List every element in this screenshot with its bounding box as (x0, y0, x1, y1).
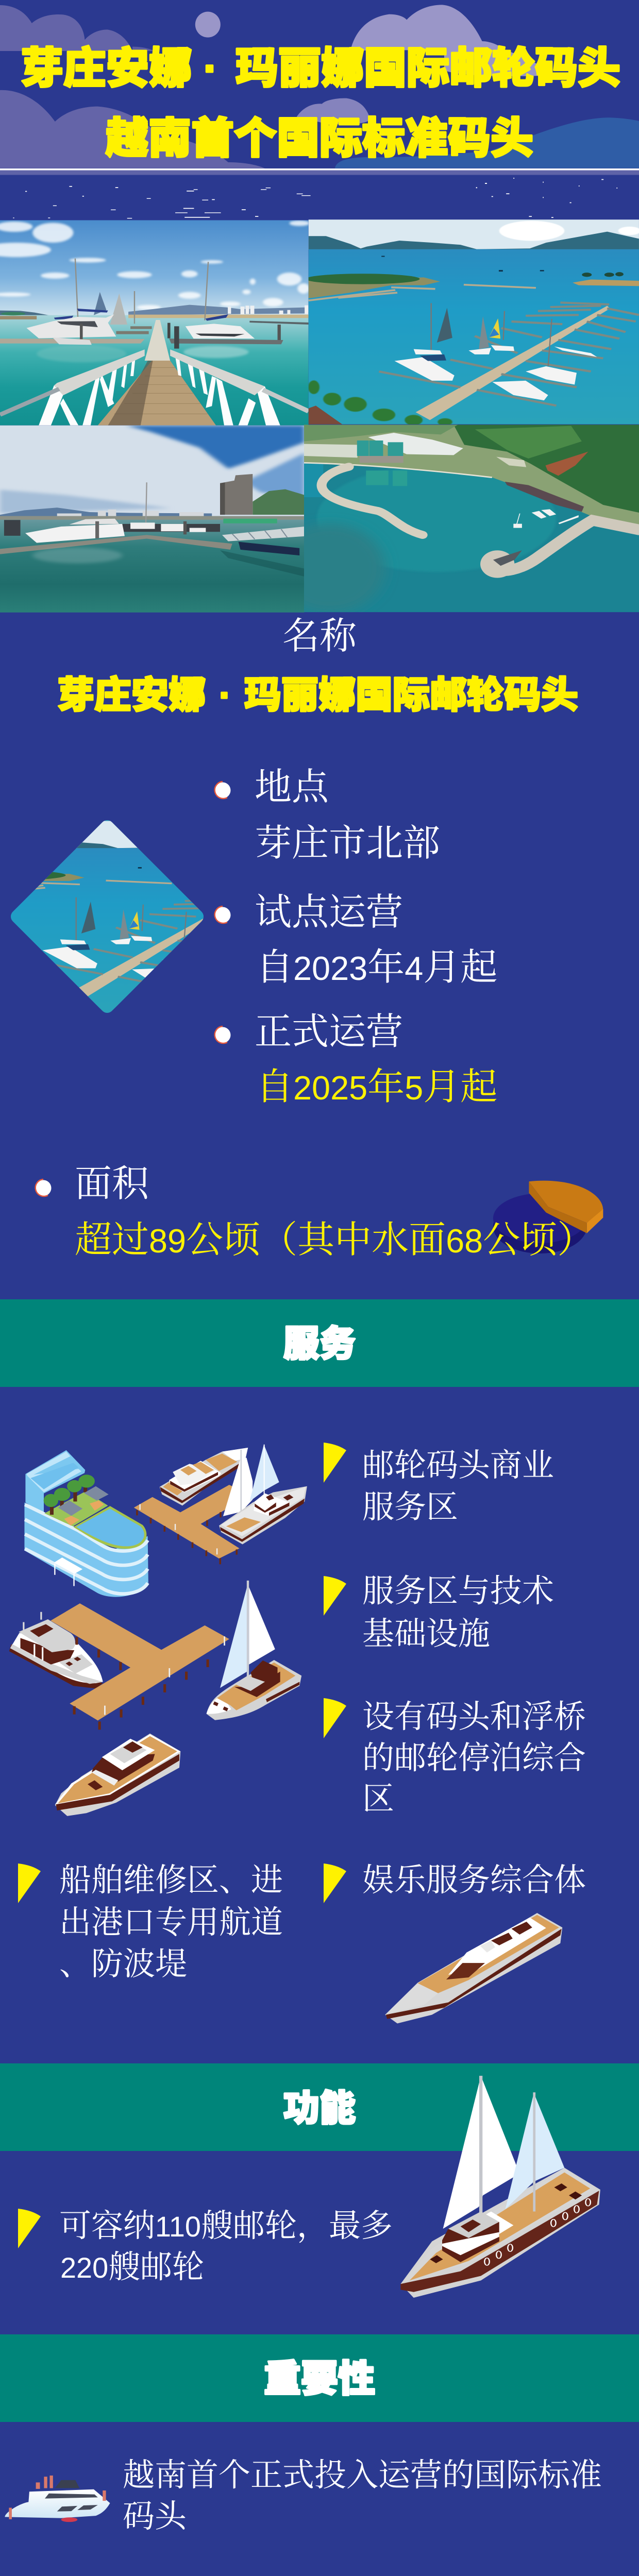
importance item: first in Vietnam: 码头 (123, 2499, 187, 2534)
section band: importance (0, 2334, 639, 2422)
illustration: large sailboat (400, 2076, 600, 2298)
info: location: 地点 (255, 767, 330, 808)
info: location: 芽庄市北部 (255, 823, 440, 864)
photo: walkway to yachts (0, 220, 310, 426)
info: official operation: 自2025年5月起 (256, 1066, 497, 1108)
sailboat two (207, 1581, 301, 1720)
info: official operation: 正式运营 (255, 1011, 403, 1053)
section band: importance: 重要性 (264, 2359, 375, 2400)
service list (18, 1443, 586, 1982)
info: trial operation: 试点运营 (255, 892, 403, 933)
service item: technical infrastructure: 服务区与技术 (362, 1574, 554, 1609)
isometric building (24, 1450, 148, 1597)
info: trial operation: 自2023年4月起 (256, 947, 497, 988)
motor yacht (9, 1612, 103, 1688)
title (21, 44, 620, 162)
service item: berthing complex (324, 1698, 586, 1817)
illustration: motorboat (55, 1734, 180, 1816)
info: location (214, 767, 440, 864)
title: 玛丽娜国际邮轮码头 (236, 44, 620, 92)
service item: ship repair: 出港口专用航道 (59, 1905, 283, 1940)
service item: ship repair: 船舶维修区、进 (59, 1863, 283, 1898)
diamond photo (11, 820, 204, 1013)
photo: aerial marina piers (306, 219, 639, 426)
importance item: first in Vietnam: 越南首个正式投入运营的国际标准 (123, 2458, 602, 2493)
section band: function: 功能 (283, 2088, 356, 2128)
service item: berthing complex: 区 (362, 1782, 394, 1817)
project name: 芽庄安娜 (57, 675, 206, 716)
service item: ship repair (18, 1863, 283, 1982)
header divider band (0, 168, 639, 175)
bullet (214, 906, 231, 923)
icon: yacht with people (5, 2476, 110, 2522)
label: name: 名称 (282, 616, 357, 657)
project name: 玛丽娜国际邮轮码头 (244, 675, 578, 716)
cabin cruiser (160, 1448, 248, 1505)
function item (18, 2209, 393, 2285)
service item: commercial zone: 服务区 (362, 1490, 458, 1525)
photo: aerial bay with breakwaters (274, 425, 639, 613)
star field (13, 178, 617, 218)
sailboat one (219, 1445, 307, 1544)
service item: technical infrastructure (324, 1574, 554, 1652)
illustration: building, dock and boats (9, 1445, 307, 1730)
bullet (35, 1179, 52, 1196)
section band: services (0, 1299, 639, 1387)
service item: technical infrastructure: 基础设施 (362, 1617, 490, 1652)
service item: berthing complex: 的邮轮停泊综合 (362, 1741, 586, 1776)
header clouds and moon (0, 5, 639, 168)
title: · (204, 44, 218, 92)
bullet (214, 1026, 231, 1043)
service item: commercial zone: 邮轮码头商业 (362, 1448, 554, 1483)
function item: 可容纳110艘邮轮，最多 (59, 2209, 393, 2244)
function item: 220艘邮轮 (60, 2250, 204, 2285)
upper dock (134, 1485, 243, 1564)
info: area: 面积 (75, 1163, 150, 1205)
info: area (35, 1163, 594, 1261)
service item: ship repair: 、防波堤 (59, 1947, 187, 1982)
icon: pie chart (493, 1181, 603, 1253)
title: 芽庄安娜 (21, 44, 192, 92)
info: official operation (214, 1011, 497, 1108)
section band: services: 服务 (283, 1324, 356, 1364)
section band: function (0, 2063, 639, 2151)
bullet (214, 782, 231, 799)
service item: entertainment: 娱乐服务综合体 (362, 1863, 586, 1898)
info: trial operation (214, 892, 497, 988)
service item: berthing complex: 设有码头和浮桥 (362, 1700, 586, 1735)
importance item: first in Vietnam (123, 2458, 602, 2534)
title: 越南首个国际标准码头 (106, 114, 533, 162)
project name: · (219, 675, 231, 716)
illustration: long yacht (385, 1913, 562, 2023)
service item: commercial zone (324, 1443, 554, 1525)
photo: marina with tower (0, 426, 305, 613)
info: area: 超过89公顷（其中水面68公顷） (75, 1219, 594, 1261)
lower dock (51, 1603, 229, 1730)
